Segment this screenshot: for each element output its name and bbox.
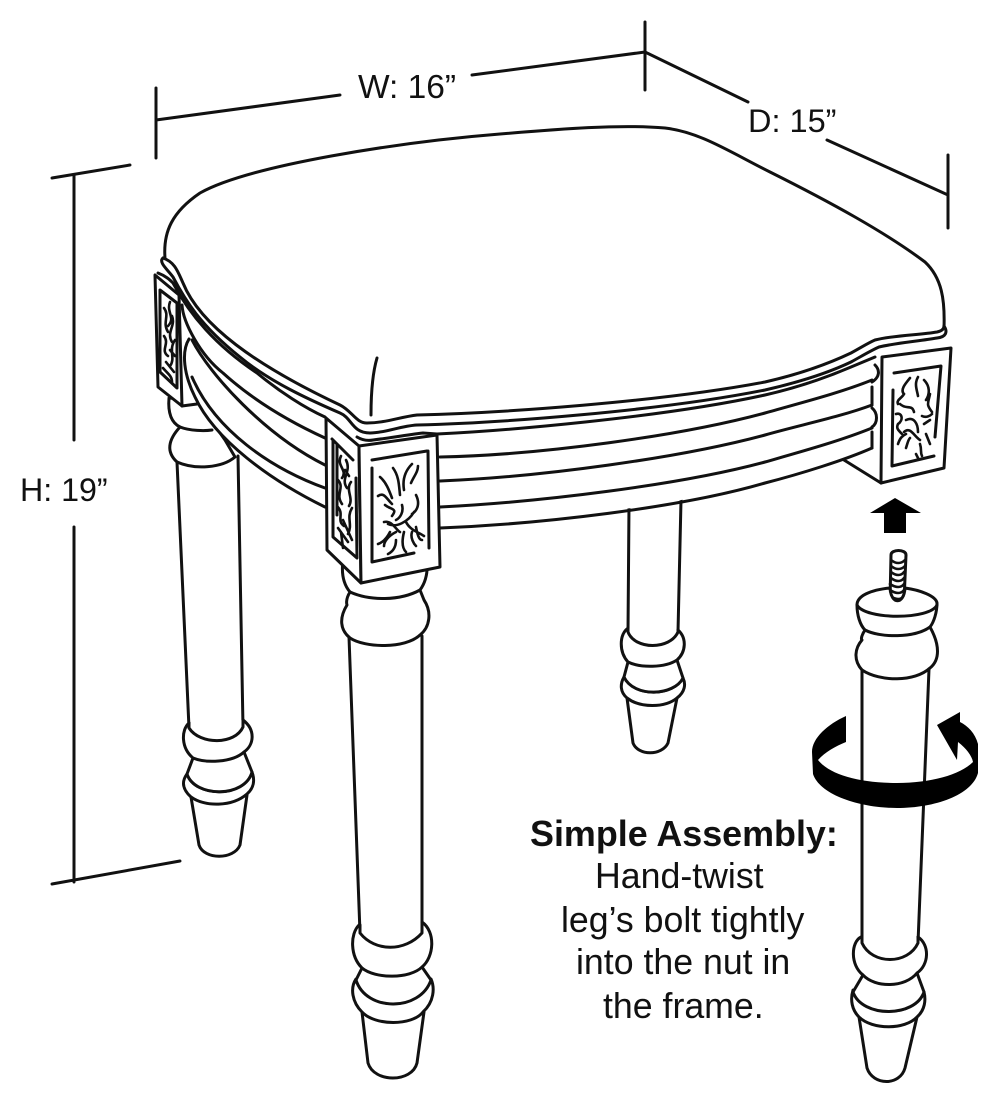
apron backing: [155, 258, 951, 583]
height label: H: 19”: [20, 472, 108, 508]
assembly instructions: leg’s bolt tightly: [561, 900, 805, 940]
threaded bolt: [890, 550, 906, 604]
assembly up arrow: [870, 498, 921, 533]
apron rails: [182, 305, 881, 528]
right corner block: [881, 348, 951, 483]
front corner block: [326, 418, 440, 583]
left block ornament: [163, 302, 175, 382]
seat corner tuck: [371, 358, 377, 415]
height dimension line: [52, 165, 180, 884]
leg top disc and bulge: [856, 588, 938, 679]
left corner block: [155, 275, 197, 406]
assembly note: [530, 814, 838, 1026]
front block right ornament: [378, 464, 424, 554]
assembly heading: Simple Assembly:: [530, 814, 838, 854]
seat cushion: [165, 127, 944, 328]
leg shaft: [862, 669, 929, 943]
seat lip mouldings: [158, 258, 946, 440]
front leg: [342, 560, 433, 1078]
right block ornament: [896, 377, 932, 458]
width label: W: 16”: [358, 69, 456, 106]
front block left ornament: [337, 456, 352, 548]
assembly instructions: into the nut in: [576, 942, 790, 982]
assembly instructions: Hand-twist: [595, 856, 764, 896]
leg lower ring: [852, 990, 925, 1027]
depth dimension line: [645, 52, 948, 228]
back leg: [621, 500, 685, 753]
rotation arrow: [812, 712, 978, 808]
leg foot: [859, 1017, 917, 1082]
detached leg: [852, 550, 938, 1082]
assembly instructions: the frame.: [603, 986, 764, 1026]
width dimension line: [156, 22, 645, 158]
left leg: [169, 398, 254, 856]
depth label: D: 15”: [748, 103, 837, 139]
